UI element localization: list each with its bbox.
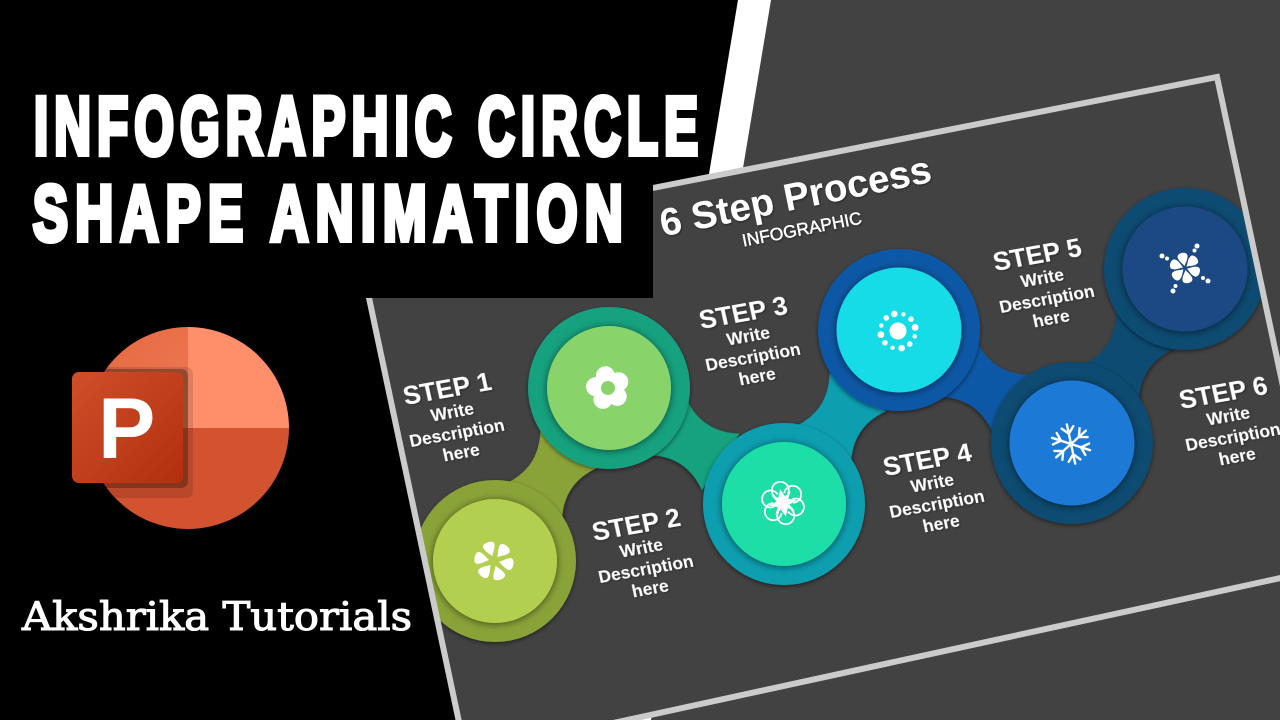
step 4 label: STEP 4 (880, 437, 975, 482)
step 5 node: mid blue (991, 312, 1173, 524)
step 4 label: here (921, 510, 962, 536)
slide background (358, 77, 1280, 720)
panel: tilted slide (358, 77, 1280, 720)
icon: PowerPoint logo (72, 327, 289, 529)
step 1 label: Write (429, 398, 476, 425)
step 3 label: here (737, 363, 778, 389)
step 3 node: teal (703, 373, 886, 585)
step 3 label: STEP 3 (696, 290, 790, 335)
step 5 label: STEP 5 (990, 232, 1084, 277)
heading: 6 Step Process: 6 Step Process (656, 148, 935, 245)
step 1 label (396, 365, 511, 471)
step 3 label: Write (725, 322, 772, 349)
step 1 label: here (441, 439, 482, 465)
title (33, 81, 698, 258)
step 5 label: here (1031, 305, 1072, 331)
slide border (358, 77, 1280, 720)
step 2 label (585, 501, 700, 607)
step 3 label (692, 289, 807, 395)
step 6 label: STEP 6 (1176, 370, 1270, 415)
step 3 label: Description (703, 339, 802, 375)
step 2 node: green teal (528, 307, 740, 490)
step 6 label: here (1217, 443, 1258, 469)
step 4 node: royal blue and cyan (818, 249, 1030, 432)
step 2 label: Write (618, 534, 665, 561)
subheading: infographic: INFOGRAPHIC (740, 208, 863, 251)
brand name: Akshrika Tutorials (21, 595, 412, 640)
background: black left panel (0, 0, 738, 720)
step 5 label: Description (997, 281, 1096, 317)
step 2 label: here (630, 575, 671, 601)
step 2 label: STEP 2 (589, 502, 683, 547)
step 4 label: Write (909, 469, 956, 496)
step 1 label: STEP 1 (400, 366, 494, 411)
slide heading (656, 148, 935, 251)
step 6 label: Description (1183, 419, 1280, 455)
step 4 label (876, 436, 991, 542)
step 5 label: Write (1019, 264, 1066, 291)
title panel (0, 60, 653, 298)
process chain (414, 188, 1266, 642)
step 1 label: Description (407, 415, 506, 451)
title: INFOGRAPHIC CIRCLE (34, 81, 698, 172)
step 6 label: Write (1205, 402, 1252, 429)
step 4 label: Description (887, 486, 986, 522)
step 5 label (986, 231, 1101, 337)
step 2 label: Description (596, 551, 695, 587)
step 6 label (1172, 369, 1280, 475)
step 6 node: deep navy (1104, 188, 1266, 350)
icon: PowerPoint logo: P (98, 381, 155, 477)
step 1 node: olive green (414, 430, 597, 642)
title: SHAPE ANIMATION (33, 171, 623, 258)
white diagonal stripe (618, 0, 771, 720)
